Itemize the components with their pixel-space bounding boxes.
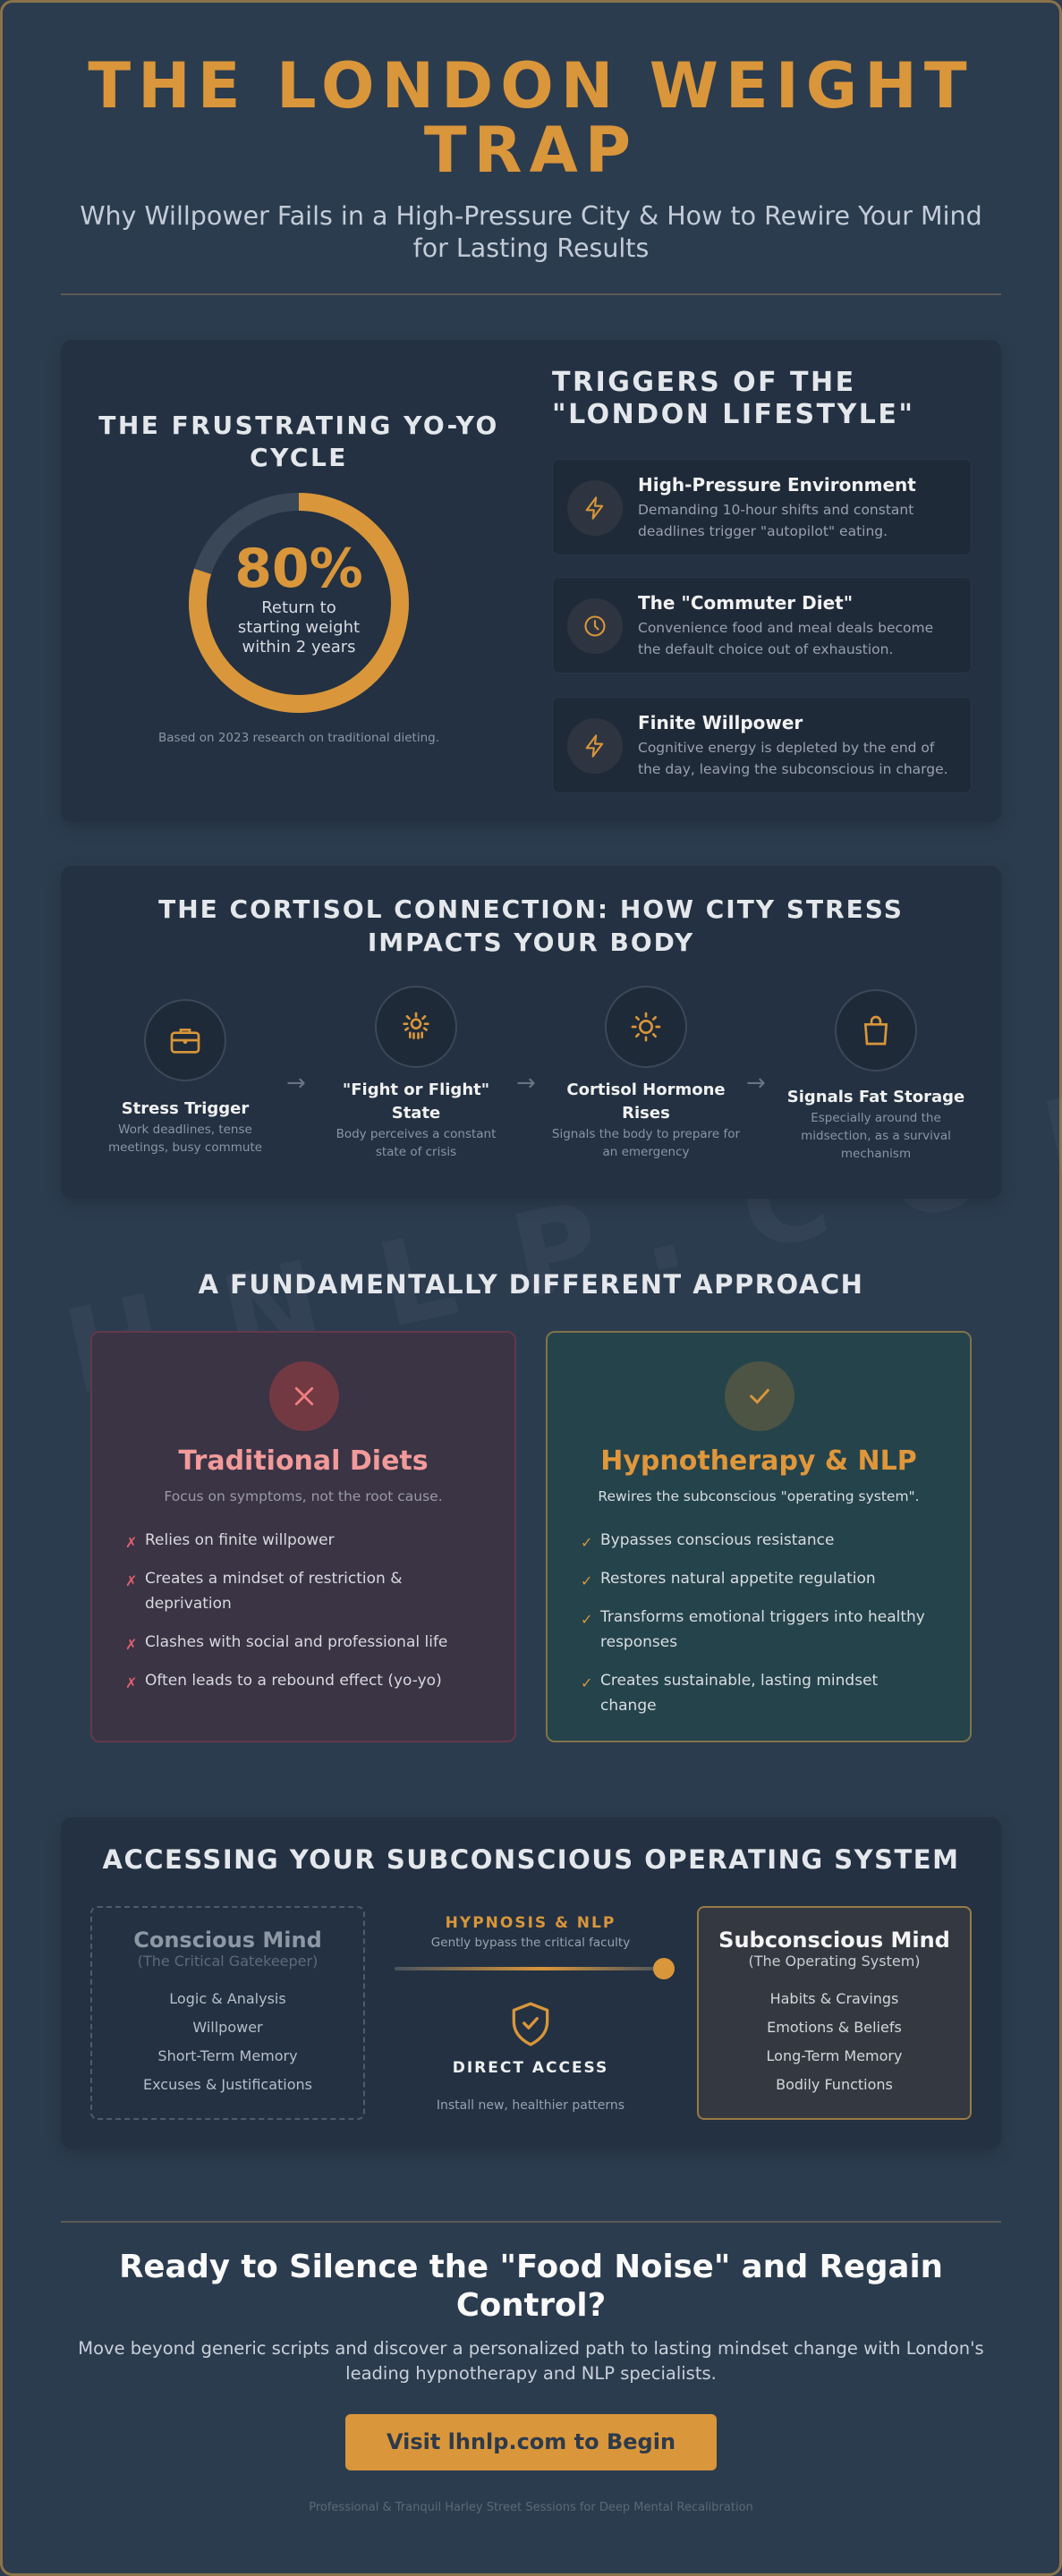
step: fat storage: mechanism [841,1147,911,1161]
title: THE LONDON WEIGHT [88,49,974,123]
step: fight or flight: state of crisis [376,1145,456,1159]
box: subconscious mind: (The Operating System) [748,1953,921,1970]
box: conscious mind: Excuses & Justifications [143,2076,312,2093]
subtitle [80,201,982,263]
arrow: → [516,1070,536,1097]
list: benefits: ✓ [581,1572,592,1589]
list: benefits: ✓ [581,1534,592,1551]
list: drawbacks: ✗ [125,1534,137,1551]
box: subconscious mind [697,1906,972,2120]
heading: different approach: A FUNDAMENTALLY DIFFERENT APPROACH [199,1269,863,1300]
card: commuter diet: The "Commuter Diet" [638,592,853,614]
icon: bolt [567,480,623,536]
card: finite willpower [552,697,972,793]
list: drawbacks: Creates a mindset of restriction & deprivation [145,1570,402,1613]
list: benefits: Bypasses conscious resistance [600,1531,834,1549]
panel: hypnotherapy [546,1331,972,1742]
step: stress trigger [108,999,262,1155]
step: fight or flight: "Fight or Flight" [343,1080,489,1099]
list: benefits: Transforms emotional triggers into healthy responses [600,1608,925,1651]
donut chart 80% [189,493,409,713]
heading: triggers [552,367,915,430]
panel: traditional diets [90,1331,516,1742]
subtitle: for Lasting Results [413,233,649,263]
card title: Traditional Diets [178,1445,429,1477]
card: high pressure: Demanding 10-hour shifts and constant [638,502,913,518]
heading: triggers: "LONDON LIFESTYLE" [552,399,915,430]
list: drawbacks: Relies on finite willpower [145,1531,335,1549]
footer: Professional & Tranquil Harley Street Sessions for Deep Mental Recalibration [309,2501,753,2514]
step: stress trigger: Work deadlines, tense [118,1123,252,1137]
CTA text: Move beyond generic scripts and discover a personalized path to lasting mindset change with London's leading hypnotherapy and NLP specialists. [78,2338,984,2384]
step: stress trigger: meetings, busy commute [108,1140,262,1155]
heading: THE CORTISOL CONNECTION: HOW CITY STRESS [158,894,904,924]
title [88,49,974,187]
list: drawbacks: ✗ [125,1636,137,1653]
list: benefits: Creates sustainable, lasting mindset change [600,1672,878,1715]
step: fight or flight: State [392,1104,440,1123]
box: subconscious mind: Habits & Cravings [770,1990,898,2007]
button [345,2414,717,2470]
step: fight or flight: Body perceives a constant [336,1127,496,1141]
card: high pressure [552,459,972,555]
list: drawbacks: ✗ [125,1674,137,1691]
arrow: → [286,1070,306,1097]
step: stress trigger: Stress Trigger [122,1099,249,1118]
step: cortisol rises: an emergency [602,1145,690,1159]
box: subconscious mind: Bodily Functions [776,2076,893,2093]
connector: hypnosis & nlp: HYPNOSIS & NLP [446,1914,616,1932]
icon: bolt [567,718,623,774]
donut chart 80%: starting weight [238,618,360,637]
icon: briefcase [144,999,226,1081]
card title: Hypnotherapy & NLP [600,1445,917,1477]
step: cortisol rises: Cortisol Hormone [566,1080,726,1099]
heading: yo-yo cycle: CYCLE [250,443,348,472]
arrow: → [746,1070,766,1097]
card: commuter diet: the default choice out of exhaustion. [638,641,893,657]
icon: shield [512,2002,549,2046]
icon: alarm [375,986,457,1068]
box: subconscious mind: Subconscious Mind [718,1928,950,1953]
card: commuter diet [552,577,972,674]
connector: hypnosis & nlp: Install new, healthier patterns [437,2098,624,2113]
panel: hypnotherapy: Rewires the subconscious "operating system". [598,1488,920,1504]
list: drawbacks: Clashes with social and professional life [145,1633,447,1651]
panel: subconscious operating system [61,1818,1001,2148]
icon: check [725,1361,794,1431]
box: conscious mind: (The Critical Gatekeeper) [138,1953,318,1970]
panel: traditional diets: Focus on symptoms, not the root cause. [164,1488,443,1504]
step: fat storage: midsection, as a survival [801,1129,951,1143]
connector: hypnosis & nlp [395,1914,675,2113]
box: conscious mind: Short-Term Memory [157,2047,298,2064]
button: Visit lhnlp.com to Begin [387,2429,675,2454]
panel: yo-yo cycle and triggers [61,340,1001,822]
step: fat storage: Signals Fat Storage [787,1088,964,1106]
step: cortisol rises: Signals the body to prepare for [552,1127,740,1141]
step: fight or flight [336,986,496,1159]
box: conscious mind: Conscious Mind [133,1928,322,1953]
list: benefits [581,1531,925,1715]
heading: IMPACTS YOUR BODY [368,928,694,957]
card: finite willpower: Cognitive energy is depleted by the end of [638,740,934,756]
list: benefits: ✓ [581,1674,592,1691]
source note: Based on 2023 research on traditional dieting. [158,731,439,745]
CTA heading: Ready to Silence the "Food Noise" and Regain Control? [119,2249,943,2324]
icon: cross [269,1361,339,1431]
list: drawbacks: Often leads to a rebound effect (yo-yo) [145,1672,442,1690]
panel: cortisol connection [61,866,1001,1199]
card: finite willpower: Finite Willpower [638,712,803,733]
box: conscious mind [90,1906,365,2120]
heading: yo-yo cycle [98,411,499,472]
list: drawbacks: ✗ [125,1572,137,1589]
step: fat storage: Especially around the [811,1111,941,1125]
heading: ACCESSING YOUR SUBCONSCIOUS OPERATING SYSTEM [103,1844,959,1875]
box: conscious mind: Willpower [192,2019,263,2036]
box: subconscious mind: Emotions & Beliefs [767,2019,902,2036]
donut chart 80%: Return to [261,598,336,617]
step: fat storage [787,989,964,1161]
connector: hypnosis & nlp: Gently bypass the critical faculty [431,1936,630,1950]
card: finite willpower: the day, leaving the subconscious in charge. [638,761,948,777]
list: drawbacks [125,1531,447,1691]
card: high pressure: deadlines trigger "autopilot" eating. [638,523,888,539]
title: TRAP [424,114,638,187]
subtitle: Why Willpower Fails in a High-Pressure City & How to Rewire Your Mind [80,201,982,231]
icon: bag [835,989,917,1072]
step: cortisol rises: Rises [622,1104,670,1123]
list: benefits: Restores natural appetite regulation [600,1570,876,1588]
box: conscious mind: Logic & Analysis [169,1990,286,2007]
box: subconscious mind: Long-Term Memory [767,2047,902,2064]
donut chart 80%: within 2 years [242,638,356,657]
donut chart 80%: 80% [234,538,363,600]
heading: triggers: TRIGGERS OF THE [552,367,856,398]
step: cortisol rises [552,986,741,1159]
connector: hypnosis & nlp: DIRECT ACCESS [453,2059,608,2077]
icon: sun [605,986,687,1068]
list: benefits: ✓ [581,1611,592,1628]
heading [158,894,904,957]
heading: yo-yo cycle: THE FRUSTRATING YO-YO [98,411,499,440]
icon: clock [567,598,623,654]
card: high pressure: High-Pressure Environment [638,474,916,496]
card: commuter diet: Convenience food and meal deals become [638,620,933,636]
